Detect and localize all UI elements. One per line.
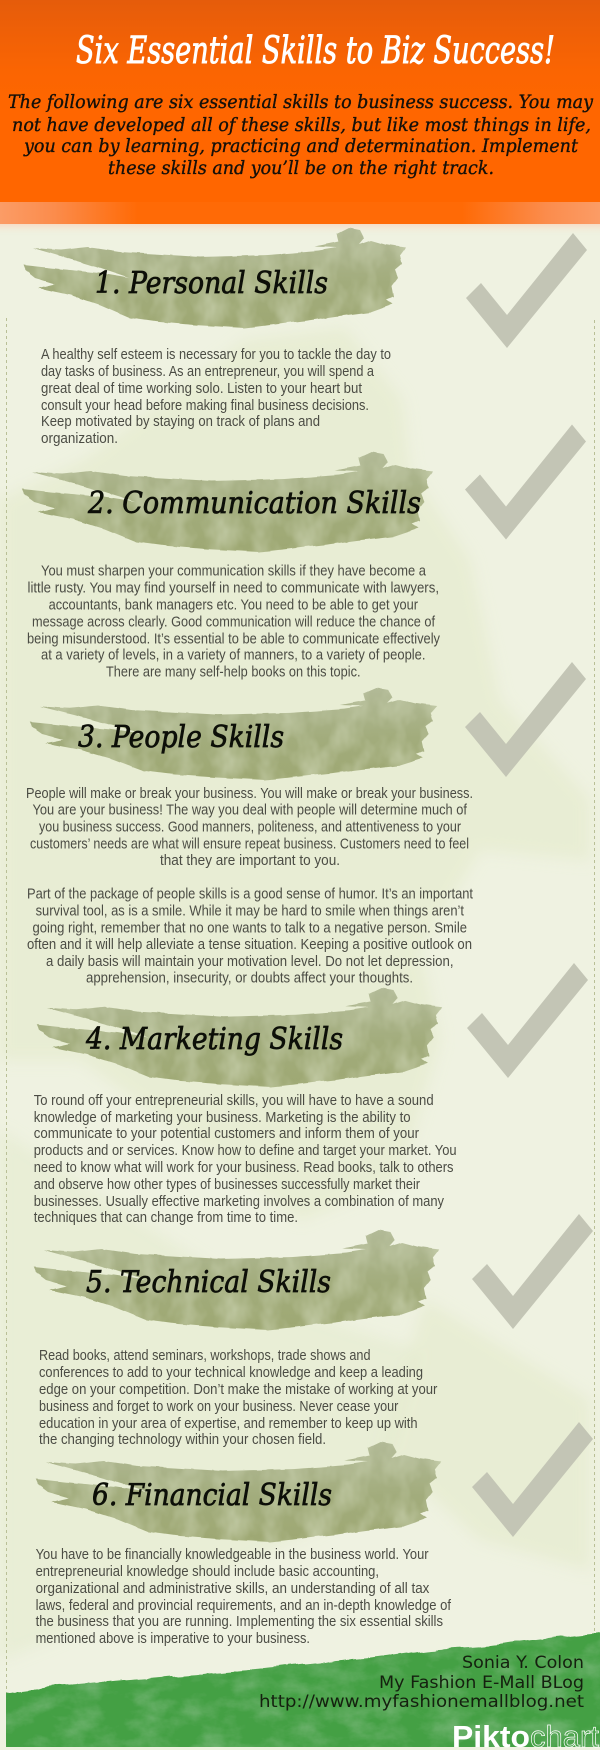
body text 4: To round off your entrepreneurial skills, you will have to have a sound	[34, 1093, 434, 1109]
heading 1: 1. Personal Skills	[95, 266, 328, 301]
body text 1	[41, 347, 391, 447]
brush stroke 6	[35, 1442, 441, 1542]
body text 3: customers’ needs are what will ensure repeat business. Customers need to feel	[30, 836, 469, 852]
brush stroke 3	[29, 688, 437, 780]
body text 4: communicate to your potential customers and inform them of your	[34, 1126, 419, 1142]
body text 3: going right, remember that no one wants to talk to a negative person. Smile	[32, 920, 467, 936]
brush stroke 5	[33, 1230, 439, 1330]
body text 5: conferences to add to your technical knowledge and keep a leading	[39, 1365, 423, 1381]
header panel	[0, 0, 600, 224]
body text 1: A healthy self esteem is necessary for you to tackle the day to	[41, 347, 391, 363]
credits	[259, 1653, 584, 1712]
body text 3: often and it will help alleviate a tense situation. Keeping a positive outlook on	[27, 937, 472, 953]
body text 6: entrepreneurial knowledge should include basic accounting,	[36, 1564, 379, 1580]
section 6: financial skills	[35, 1442, 452, 1647]
dashed side rules	[6, 318, 594, 1700]
body text 6: laws, federal and provincial requirements, and an in-depth knowledge of	[36, 1598, 452, 1614]
heading 2: 2. Communication Skills	[87, 486, 421, 521]
body text 4: businesses. Usually effective marketing involves a combination of many	[34, 1194, 445, 1210]
body text 1: consult your head before making final business decisions.	[41, 398, 369, 414]
body text 3: that they are important to you.	[160, 853, 340, 869]
body text 2	[27, 564, 441, 681]
body text 3	[26, 786, 473, 987]
footer green wash	[0, 1631, 600, 1750]
body text 6: mentioned above is imperative to your business.	[36, 1631, 310, 1647]
body text 3: you business success. Good manners, politeness, and attentiveness to your	[39, 820, 461, 836]
body text 3: You are your business! The way you deal with people will determine much of	[32, 803, 468, 819]
body text 5: Read books, attend seminars, workshops, trade shows and	[39, 1348, 370, 1364]
credits: My Fashion E-Mall BLog	[379, 1673, 584, 1693]
credits: Sonia Y. Colon	[462, 1653, 584, 1673]
body text 1: day tasks of business. As an entrepreneur, you will spend a	[41, 364, 375, 380]
intro text: these skills and you’ll be on the right track.	[108, 158, 494, 179]
body text 5: education in your area of expertise, and remember to keep up with	[39, 1416, 418, 1432]
brush stroke 1	[23, 228, 406, 328]
body text 1: Keep motivated by staying on track of plans and	[41, 414, 320, 430]
body text 1: great deal of time working solo. Listen to your heart but	[41, 381, 362, 397]
section 4: marketing skills	[34, 988, 457, 1226]
body text 4: products and or services. Know how to define and target your market. You	[34, 1143, 457, 1159]
icon: check mark 3	[465, 662, 586, 777]
body text 3: apprehension, insecurity, or doubts affect your thoughts.	[86, 971, 413, 987]
icon: check mark 2	[465, 424, 586, 540]
body text 3: a daily basis will maintain your motivation level. Do not let depression,	[46, 954, 454, 970]
body text 5: edge on your competition. Don’t make the mistake of working at your	[39, 1382, 438, 1398]
body text 5: the changing technology within your chosen field.	[39, 1432, 326, 1448]
credits: http://www.myfashionemallblog.net	[259, 1692, 584, 1712]
section 1: personal skills	[23, 228, 406, 447]
heading 3: 3. People Skills	[78, 720, 284, 755]
body text 6: organizational and administrative skills, an understanding of all tax	[36, 1581, 430, 1597]
body text 6: You have to be financially knowledgeable in the business world. Your	[36, 1547, 429, 1563]
body text 6: the business that you are running. Implementing the six essential skills	[36, 1614, 443, 1630]
body text 2: accountants, bank managers etc. You need to be able to get your	[49, 597, 418, 613]
heading 4: 4. Marketing Skills	[85, 1022, 343, 1057]
body text 2: message across clearly. Good communication will reduce the chance of	[32, 615, 436, 631]
body text 4	[34, 1093, 457, 1226]
icon: check mark 5	[472, 1214, 593, 1329]
body text 3: Part of the package of people skills is a good sense of humor. It’s an important	[27, 887, 473, 903]
body text 2: little rusty. You may find yourself in need to communicate with lawyers,	[28, 581, 439, 597]
body text 5	[39, 1348, 438, 1448]
body text 2: You must sharpen your communication skills if they have become a	[41, 564, 427, 580]
intro text	[8, 92, 594, 179]
icon: check mark 6	[472, 1422, 593, 1537]
body text 2: at a variety of levels, in a variety of manners, to a variety of people.	[41, 648, 426, 664]
piktochart logo	[452, 1719, 599, 1750]
body text 4: need to know what will work for your business. Read books, talk to others	[34, 1160, 453, 1176]
icon: check mark 1	[466, 233, 587, 348]
brush stroke 4	[36, 988, 442, 1087]
body text 1: organization.	[41, 431, 118, 447]
brush stroke 2	[21, 452, 433, 552]
body text 2: There are many self-help books on this topic.	[106, 665, 360, 681]
section 3: people skills	[26, 688, 473, 987]
section 2: communication skills	[21, 452, 441, 681]
body text 3: survival tool, as is a smile. While it may be hard to smile when things aren’t	[36, 904, 464, 920]
body text 2: being misunderstood. It’s essential to be able to communicate effectively	[27, 632, 441, 648]
heading 5: 5. Technical Skills	[86, 1265, 331, 1300]
body text 4: knowledge of marketing your business. Marketing is the ability to	[34, 1110, 411, 1126]
body text 6	[36, 1547, 452, 1647]
body text 5: business and forget to work on your business. Never cease your	[39, 1399, 399, 1415]
body text 4: and observe how other types of businesses successfully market their	[34, 1177, 420, 1193]
body text 3: People will make or break your business. You will make or break your business.	[26, 786, 473, 802]
intro text: you can by learning, practicing and determination. Implement	[23, 136, 579, 157]
section 5: technical skills	[33, 1230, 439, 1448]
heading 6: 6. Financial Skills	[92, 1478, 332, 1513]
icon: check mark 4	[467, 963, 588, 1078]
body text 4: techniques that can change from time to time.	[34, 1210, 298, 1226]
